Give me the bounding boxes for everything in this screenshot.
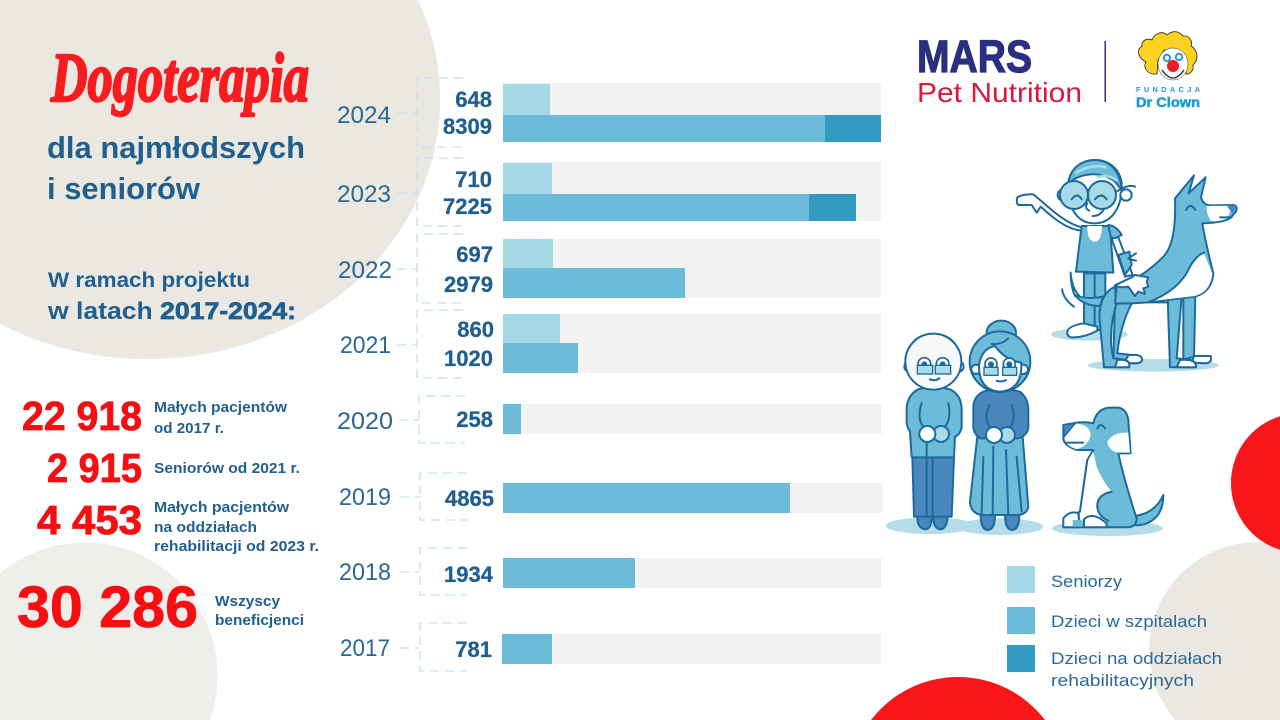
illustration: boy with dog (1017, 160, 1237, 372)
legend: children in rehabilitation wards (1007, 645, 1222, 690)
body and head (1115, 175, 1237, 303)
row 2018: 2018 (339, 559, 391, 586)
stat: rehabilitation patients: 4 453 (37, 497, 142, 543)
row 2022 (338, 234, 881, 303)
background circle: top left (0, 0, 440, 359)
sitting dog (1063, 408, 1163, 527)
stat: small patients: od 2017 r. (154, 420, 224, 437)
stat: small patients: 22 918 (22, 393, 142, 439)
stat: seniors: Seniorów od 2021 r. (154, 460, 300, 477)
stat: all beneficiaries (17, 575, 304, 640)
logo: Mars Pet Nutrition: MARS (917, 31, 1032, 82)
legend: children in rehabilitation wards: rehabilitacyjnych (1051, 671, 1194, 690)
stat: rehabilitation patients: na oddziałach (154, 519, 257, 536)
row 2021: 860 (457, 317, 494, 342)
row 2020 (337, 396, 882, 443)
title: Dogoterapia (50, 40, 309, 117)
subtitle (47, 130, 305, 206)
row 2024 (337, 78, 881, 147)
row 2022: 2979 (444, 272, 493, 297)
logo: Mars Pet Nutrition: Pet Nutrition (917, 77, 1082, 108)
tall dog (1062, 175, 1237, 367)
row 2018: 1934 (444, 562, 494, 587)
logo: Fundacja Dr Clown: FUNDACJA (1136, 85, 1201, 94)
legend: seniors (1007, 566, 1123, 593)
row 2019: 4865 (445, 486, 494, 511)
grandfather (904, 334, 964, 529)
row 2021: 1020 (444, 346, 493, 371)
near front leg (1168, 297, 1196, 367)
row 2023: 7225 (443, 194, 492, 219)
stat: seniors (47, 445, 300, 491)
row 2024: 8309 (443, 114, 492, 139)
background circle: bottom right (1149, 542, 1280, 720)
near back leg (1099, 287, 1129, 367)
stat: all beneficiaries: beneficjenci (215, 612, 304, 629)
row 2018 (339, 548, 882, 595)
boy (1017, 160, 1136, 337)
stat: all beneficiaries: 30 286 (17, 575, 198, 640)
project period heading: w latach 2017-2024: (47, 298, 296, 325)
row 2021: 2021 (340, 332, 391, 359)
row 2020: 2020 (337, 408, 393, 435)
far front leg (1183, 297, 1195, 360)
logo: Mars Pet Nutrition (917, 31, 1082, 108)
row 2022: 2022 (338, 257, 392, 284)
project period heading (47, 269, 296, 325)
row 2017 (340, 623, 881, 671)
row 2024: 648 (455, 87, 492, 112)
stat: rehabilitation patients: Małych pacjentów (154, 499, 289, 516)
stat: rehabilitation patients: rehabilitacji od 2023 r. (154, 538, 319, 555)
row 2022: 697 (456, 242, 493, 267)
logo divider (1104, 41, 1106, 102)
row 2021 (340, 310, 881, 378)
grandmother (970, 321, 1030, 530)
row 2023: 710 (455, 167, 492, 192)
project period heading: W ramach projektu (48, 269, 250, 292)
row 2019: 2019 (339, 484, 391, 511)
logo: Fundacja Dr Clown (1136, 32, 1201, 110)
legend: children in hospitals (1007, 607, 1207, 634)
row 2024: 2024 (337, 102, 391, 129)
stat: small patients (22, 393, 287, 439)
illustration: seniors and dog (886, 321, 1163, 536)
row 2020: 258 (456, 407, 493, 432)
stat: small patients: Małych pacjentów (154, 399, 287, 416)
stat: seniors: 2 915 (47, 445, 142, 491)
row 2023: 2023 (337, 181, 391, 208)
row 2017: 2017 (340, 635, 390, 662)
subtitle: i seniorów (47, 171, 201, 206)
row 2023 (337, 158, 881, 226)
stat: all beneficiaries: Wszyscy (215, 593, 281, 610)
stat: rehabilitation patients (37, 497, 319, 555)
background circle: bottom red (871, 677, 1045, 720)
legend: children in hospitals: Dzieci w szpitalach (1051, 612, 1207, 631)
background circle: bottom left (0, 543, 218, 720)
row 2017: 781 (455, 637, 492, 662)
legend (1007, 566, 1222, 690)
far back leg (1113, 303, 1142, 363)
legend: seniors: Seniorzy (1051, 572, 1123, 591)
subtitle: dla najmłodszych (47, 130, 305, 165)
bar chart (337, 78, 883, 671)
background circle: right red (1231, 416, 1280, 550)
legend: children in rehabilitation wards: Dzieci na oddziałach (1051, 649, 1222, 668)
row 2019 (339, 473, 883, 520)
logo: Fundacja Dr Clown: Dr Clown (1136, 94, 1200, 110)
